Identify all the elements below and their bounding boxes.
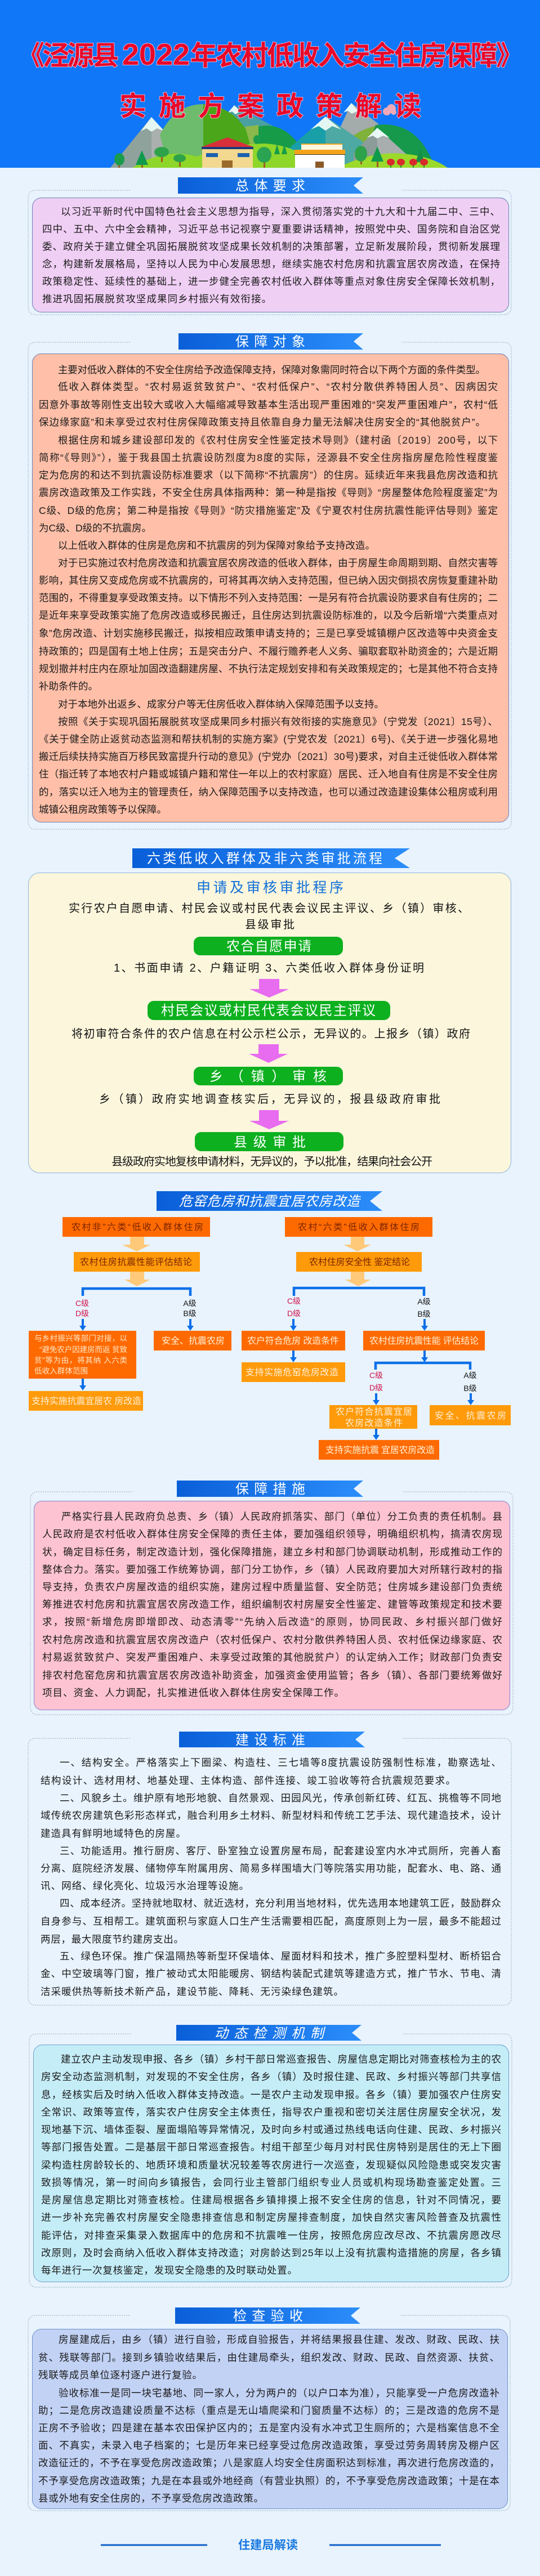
text block: 念，构建新发展格局，坚持以人民为中心发展思想，继续实施农村危房和抗震宜居农房改造，在保持 bbox=[42, 258, 500, 270]
text block: 县或外地有安全住房的，不予享受危房改造政策。 bbox=[38, 2493, 264, 2504]
intro text: 县级审批 bbox=[245, 918, 294, 931]
right branch: D级 bbox=[369, 1383, 383, 1392]
left branch: 贫”等为由，将其纳 入六类 bbox=[34, 1356, 127, 1365]
step: application bbox=[194, 937, 343, 955]
text block: 结构设计、选材用材、地基处理、主体构造、部件连接、竣工验收等符合抗震规范要求。 bbox=[41, 1775, 456, 1786]
text block: 为C级、D级的不抗震房。 bbox=[39, 522, 151, 534]
text block: 对于本地外出返乡、成家分户等无住房低收入群体纳入保障范围予以支持。 bbox=[58, 699, 384, 710]
illustration: mountains, houses and trees bbox=[110, 103, 448, 168]
right branch: A级 bbox=[463, 1371, 477, 1380]
heading banner bbox=[157, 1191, 382, 1211]
right branch: 农户符合危房 改造条件 bbox=[247, 1336, 339, 1346]
arrow bbox=[249, 1110, 289, 1129]
text block: 项目、资金、人力调配，扎实推进低收入群体住房安全保障工作。 bbox=[42, 1687, 344, 1698]
panel: construction standards bbox=[28, 1732, 511, 2005]
text block: C级、D级的危房；第二种是指按《导则》“防灾措施鉴定”及《宁夏农村住房抗震性能评估导则》鉴定 bbox=[39, 505, 498, 516]
text block: 整体合力。落实。要加强工作统筹协调，部门分工协作，乡（镇）人民政府要加大对所辖行政村的指 bbox=[42, 1564, 502, 1575]
panel: coverage bbox=[28, 333, 511, 829]
panel body bbox=[33, 354, 509, 822]
heading banner: 建设标准 bbox=[235, 1733, 305, 1748]
text block: 洁采暖供热等新技术新产品，建设节能、降耗、无污染绿色建筑。 bbox=[41, 1986, 343, 1997]
text block: 村易返贫致贫户、突发严重困难户、未享受过政策的其他脱贫户）的认定纳入工作；财政部门负责安 bbox=[42, 1652, 502, 1663]
heading banner bbox=[178, 177, 363, 194]
text block: 简称“《导则》”），鉴于我县国土抗震设防烈度为8度的实际，泾源县不安全住房指房屋危险性程度鉴 bbox=[39, 452, 498, 463]
intro text bbox=[69, 902, 469, 931]
panel: inspection and acceptance bbox=[28, 2307, 510, 2511]
left branch: 与乡村振兴等部门对接，以 bbox=[34, 1334, 127, 1343]
text block: 四中、五中、六中全会精神，习近平总书记视察宁夏重要讲话精神，按照党中央、国务院和自治区党 bbox=[42, 223, 500, 235]
text block: 房安全动态监测机制，对发现的不安全住房，各乡（镇）及时报住建、民政、乡村振兴等部门共享信 bbox=[41, 2071, 501, 2082]
step: village meeting: 村民会议或村民代表会议民主评议 bbox=[161, 1003, 376, 1018]
left branch: D级 bbox=[75, 1309, 89, 1318]
right branch: 农房改造条件 bbox=[345, 1418, 403, 1428]
text block: 息，经核实后及时纳入低收入群体支持改造。一是农户主动发现申报。各乡（镇）要加强农户住房安 bbox=[41, 2089, 501, 2100]
text block: 建立农户主动发现申报、各乡（镇）乡村干部日常巡查报告、房屋信息定期比对筛查核检为主的农 bbox=[61, 2054, 501, 2065]
right branch: A级 bbox=[417, 1297, 431, 1306]
heading banner: 保障对象 bbox=[235, 334, 305, 350]
arrow bbox=[249, 979, 289, 998]
text block: 主要对低收入群体的不安全住房给予改造保障支持，保障对象需同时符合以下两个方面的条件类型。 bbox=[58, 364, 485, 375]
text block: 梁构造柱房龄较长的、地质环境和质量状况较差等农房进行一次巡查，发现疑似风险隐患或突发灾害 bbox=[41, 2159, 501, 2171]
text block: 每年进行一次复核鉴定，发现安全隐患的及时联动处置。 bbox=[41, 2265, 297, 2276]
text block bbox=[41, 2054, 501, 2276]
left branch: “避免农户因建房而返 贫致 bbox=[39, 1345, 127, 1354]
text block: 域传统农房建筑色彩形态样式，融合利用乡土材料、新型材料和传统工艺手法、现代建造技术，设计 bbox=[41, 1810, 501, 1821]
text block: 状，确定目标任务，制定改造计划，强化保障措施，建立乡村和部门协调联动机制，形成推动工作的 bbox=[42, 1546, 502, 1558]
text block: 低收入群体类型。“农村易返贫致贫户”、“农村低保户”、“农村分散供养特困人员”、因病因灾 bbox=[58, 381, 498, 392]
text block: 保边缘家庭”和未享受过农村住房保障政策支持且依靠自身力量无法解决住房安全的“其他脱贫户”。 bbox=[39, 417, 485, 428]
text block: 住（指迁转了本地农村户籍或城镇户籍和常住一年以上的农村家庭）居民、迁入地自有住房是不安全住房 bbox=[39, 768, 498, 780]
text block: 能评估，对排查采集录入数据库中的危房和不抗震唯一住房，按照危房应改尽改、不抗震房愿改尽 bbox=[41, 2230, 501, 2241]
panel: approval process bbox=[28, 848, 511, 1173]
heading banner: 动态检测机制 bbox=[215, 2026, 326, 2041]
materials text: 1、书面申请 2、户籍证明 3、六类低收入群体身份证明 bbox=[114, 961, 424, 974]
text block bbox=[42, 1511, 502, 1698]
text block: 排农村危窑危房和抗震宜居农房改造补助资金，加强资金使用监管；各乡（镇）、各部门要统筹做好 bbox=[42, 1670, 502, 1681]
intro text: 实行农户自愿申请、村民会议或村民代表会议民主评议、乡（镇）审核、 bbox=[69, 902, 469, 915]
left branch: 支持实施抗震宜居农 房改造 bbox=[32, 1396, 141, 1406]
step: township review bbox=[194, 1067, 343, 1085]
text block: 震房改造政策及工作实践，不安全住房具体指两种：第一种是指按《导则》“房屋整体危险程度鉴定”为 bbox=[39, 487, 498, 498]
text block: 五、绿色环保。推广保温隔热等新型环保墙体、屋面材料和技术，推广多腔塑料型材、断桥铝合 bbox=[60, 1951, 501, 1962]
left branch: 低收入群体范围 bbox=[34, 1367, 88, 1375]
title: 年农村低收入安全住房保障》 bbox=[190, 41, 523, 71]
text block: 筹推进农村危房和抗震宜居农房改造工作，组织编制农村房屋安全性鉴定、建管等政策规定和技术要 bbox=[42, 1599, 502, 1610]
text block: 全常识、政策等宣传，落实农户住房安全主体责任，指导农户重视和密切关注居住房屋安全状况，发 bbox=[41, 2107, 501, 2118]
text block: 贫、残联等部门。接到乡镇验收结果后，由住建局牵头，组织发改、财政、民政、自然资源、扶贫、 bbox=[38, 2352, 499, 2363]
text block: 的，落实以迁入地为主的管理责任，纳入保障范围予以支持改造，也可以通过改造建设集体公租房或利用 bbox=[39, 786, 498, 798]
right branch: 农村“六类”低收入群体住房 bbox=[298, 1222, 419, 1232]
heading banner bbox=[178, 333, 363, 350]
title: 2022 bbox=[122, 38, 190, 71]
panel: dynamic monitoring bbox=[29, 2025, 512, 2287]
heading banner: 检查验收 bbox=[233, 2309, 303, 2324]
text block bbox=[38, 2334, 500, 2504]
text block: 搬迁后续扶持实施百万移民致富提升行动的意见》(宁党办〔2021〕30号)要求，对自主迁徙低收入群体常 bbox=[39, 751, 498, 762]
village text: 将初审符合条件的农户信息在村公示栏公示，无异议的。上报乡（镇）政府 bbox=[72, 1027, 470, 1040]
icon: pink cloud bbox=[383, 104, 396, 115]
panel: renovation flowchart bbox=[29, 1191, 511, 1460]
text block: 不予享受危房改造政策；九是在本县或外地经商（有营业执照）的，不予享受危房改造政策；十是在本 bbox=[38, 2475, 499, 2486]
icon: house with red roof bbox=[202, 137, 253, 168]
hero background bbox=[0, 0, 540, 168]
right branch: 农村住房安全性 鉴定结论 bbox=[309, 1257, 410, 1267]
right branch: B级 bbox=[417, 1309, 431, 1318]
right branch: 农村住房抗震性能 评估结论 bbox=[369, 1336, 479, 1346]
heading banner bbox=[176, 2025, 362, 2041]
text block: 影响，其住房又变成危房或不抗震房的，可将其再次纳入支持范围，但已纳入因灾倒损农房恢复重建补助 bbox=[39, 575, 498, 586]
text block: 是近年来享受政策实施了危房改造或移民搬迁，且住房达到抗震设防标准的，以及今后新增“六类重点对 bbox=[39, 610, 498, 621]
text block: 三、功能适用。推行厨房、客厅、卧室独立设置房屋布局，配套建设室内水冲式厕所，完善人畜 bbox=[60, 1845, 501, 1857]
icon: tulips bbox=[387, 159, 428, 168]
text block: 致损等情况，第一时间向乡镇报告，会同行业主管部门组织专业人员或机构现场勘查鉴定处置。三 bbox=[41, 2177, 501, 2188]
arrow bbox=[249, 1044, 288, 1063]
text block: 以上低收入群体的住房是危房和不抗震房的列为保障对象给予支持改造。 bbox=[58, 540, 375, 551]
text block: 持政策的；四是国有土地上住房；五是突击分户、不履行赡养老人义务、骗取套取补助资金的；六是近期 bbox=[39, 646, 498, 657]
text block: 现地基下沉、墙体歪裂、屋面塌陷等异常情况，及时向乡村或通过热线电话向住建、民政、乡村振兴 bbox=[41, 2124, 501, 2135]
text block: 四、成本经济。坚持就地取材、就近选材，充分利用当地材料，优先选用本地建筑工匠，鼓励群众 bbox=[60, 1898, 501, 1909]
right branch: 支持实施抗震 宜居农房改造 bbox=[325, 1445, 435, 1455]
text block: 自身参与、互相帮工。建筑面积与家庭人口生产生活需要相匹配，高度原则上为一层，最多不能超过 bbox=[41, 1916, 501, 1927]
left branch: 农村非”六类“低收入群体住房 bbox=[72, 1222, 203, 1232]
left branch: 安全、抗震农房 bbox=[162, 1336, 225, 1346]
heading banner bbox=[179, 1732, 365, 1748]
heading banner bbox=[175, 2307, 360, 2324]
text block: 分离、庭院经济发展、储物停车附属用房、简易多样围墙大门等院落实用功能，配套水、电、路、通 bbox=[41, 1863, 501, 1874]
right branch: 安全、抗震农房 bbox=[435, 1411, 506, 1421]
text block: 规划撤并村庄内在原址加固改造翻建房屋、不执行法定规划安排和有关政策规定的；七是其他不符合支持 bbox=[39, 663, 498, 674]
text block: 建造具有鲜明地域特色的房屋。 bbox=[41, 1828, 186, 1839]
text block: 残联等成员单位逐村逐户进行复验。 bbox=[38, 2369, 202, 2381]
text block: 对于已实施过农村危房改造和抗震宜居农房改造的低收入群体，由于房屋生命周期到期、自然灾害等 bbox=[58, 557, 498, 569]
text block: 助；二是危房改造建设质量不达标（重点是无山墙爬梁和门窗质量不达标）的；三是改造的危房不是 bbox=[38, 2405, 499, 2416]
left branch: C级 bbox=[75, 1299, 89, 1308]
heading banner bbox=[132, 848, 410, 868]
text block: 定为危房的和达不到抗震设防标准要求（以下简称“不抗震房”）的住房。延续近年来我县危房改造和抗 bbox=[39, 469, 498, 481]
panel body bbox=[34, 1501, 510, 1710]
text block: 二、风貌乡土。维护原有地形地貌、自然景观、田园风光，传承创新红砖、红瓦、挑檐等不同地 bbox=[60, 1792, 501, 1804]
right branch: B级 bbox=[463, 1384, 477, 1393]
step: county approval: 县级审批 bbox=[234, 1135, 306, 1150]
panel: overall requirements bbox=[28, 177, 511, 315]
right branch bbox=[242, 1217, 511, 1460]
right branch: C级 bbox=[369, 1371, 383, 1380]
text block: 《关于健全防止返贫动态监测和帮扶机制的实施方案》(宁党农发〔2021〕6号)、《关于进一步强化易地 bbox=[39, 734, 498, 745]
text block: 城镇公租房政策等予以保障。 bbox=[39, 804, 167, 815]
heading banner bbox=[177, 1481, 363, 1497]
text block: 导支持，负责农户房屋改造的组织实施，建房过程中质量监督、安全防范；住房城乡建设部门负责统 bbox=[42, 1581, 502, 1593]
left branch: B级 bbox=[183, 1309, 197, 1318]
right branch: 支持实施危窑危房改造 bbox=[246, 1367, 338, 1378]
county text: 县级政府实地复核申请材料，无异议的，予以批准，结果向社会公开 bbox=[111, 1155, 432, 1168]
text block: 房屋建成后，由乡（镇）进行自验，形成自验报告，并将结果报县住建、发改、财政、民政、扶 bbox=[59, 2334, 499, 2345]
text block: 严格实行县人民政府负总责、乡（镇）人民政府抓落实、部门（单位）分工负责的责任机制。县 bbox=[61, 1511, 502, 1522]
text block bbox=[39, 364, 498, 815]
text block: 政策稳定性、延续性的基础上，进一步健全完善农村低收入群体等重点对象住房安全保障长效机制， bbox=[42, 276, 500, 287]
footer: issuing department bbox=[101, 2539, 441, 2552]
step: application: 农合自愿申请 bbox=[226, 939, 311, 954]
step: township review: 乡（镇）审核 bbox=[209, 1069, 327, 1084]
panel body bbox=[28, 873, 511, 1173]
text block: 正房不予验收；四是建在基本农田保护区内的；五是室内没有水冲式卫生厕所的；六是档案信息不全 bbox=[38, 2422, 500, 2434]
text block: 是房屋信息定期比对筛查核检。住建局根据各乡镇排摸上报不安全住房的信息，针对不同情况，要 bbox=[41, 2194, 501, 2206]
panel body bbox=[34, 2045, 509, 2282]
text block: 等部门报告处置。二是基层干部日常巡查报告。村组干部至少每月对村民住房特别是居住的无上下圈 bbox=[41, 2141, 501, 2153]
text block: 求，按照“新增危房即增即改、动态清零”“先纳入后改造”的原则，协同民政、乡村振兴部门做好 bbox=[42, 1616, 502, 1627]
title: 《泾源县 bbox=[17, 41, 119, 71]
text block: 两层，最大限度节约建房支出。 bbox=[41, 1934, 184, 1945]
left branch: A级 bbox=[183, 1299, 197, 1308]
text block: 补助条件的。 bbox=[39, 681, 98, 692]
subtitle: 实施方案政策解读 bbox=[119, 92, 421, 122]
sub-heading: 申请及审核审批程序 bbox=[197, 880, 343, 896]
text block: 面、不真实，未录入电子档案的；七是历年来已经享受过危房改造政策，享受过劳务周转房及棚户区 bbox=[38, 2440, 499, 2451]
text block bbox=[41, 1757, 501, 1997]
right branch: 农户符合抗震宜居 bbox=[336, 1407, 412, 1417]
left branch bbox=[29, 1217, 231, 1411]
panel: safeguards bbox=[30, 1481, 513, 1715]
text block: 人民政府是农村低收入群体住房安全保障的责任主体，要加强组织领导，明确组织机构，搞清农房现 bbox=[42, 1528, 502, 1540]
heading banner: 保障措施 bbox=[235, 1482, 305, 1497]
left branch: 农村住房抗震性能评估结论 bbox=[80, 1257, 192, 1267]
heading banner: 危窑危房和抗震宜居农房改造 bbox=[179, 1194, 362, 1209]
title bbox=[17, 38, 523, 71]
text block: 改造征迁的，不予在享受危房改造政策；八是家庭人均安全住房面积达到标准，再次进行危房改造的， bbox=[38, 2457, 499, 2468]
text block: 讯、网络、绿化亮化、垃圾污水治理等设施。 bbox=[41, 1880, 249, 1891]
text block: 金、中空玻璃等门窗，推广被动式太阳能暖房、钢结构装配式建筑等建造方式，推广节水、节电、清 bbox=[41, 1968, 501, 1979]
text block: 验收标准一是同一块宅基地、同一家人，分为两户的（以户口本为准），只能享受一户危房改造补 bbox=[59, 2387, 499, 2399]
text block: 按照《关于实现巩固拓展脱贫攻坚成果同乡村振兴有效衔接的实施意见》（宁党发〔2021〕15号）、 bbox=[58, 716, 498, 727]
text block: 因意外事故等刚性支出较大或收入大幅缩减导致基本生活出现严重困难的“突发严重困难户”，农村“低 bbox=[39, 399, 498, 410]
icon: white house with orange band bbox=[294, 144, 345, 168]
text block: 改原则，及时会商纳入低收入群体支持改造；对房龄达到25年以上没有抗震构造措施的房屋，各乡镇 bbox=[41, 2247, 501, 2259]
heading banner: 六类低收入群体及非六类审批流程 bbox=[147, 851, 382, 866]
right branch: C级 bbox=[287, 1296, 301, 1305]
text block: 委、政府关于建立健全巩固拓展脱贫攻坚成果长效机制的决策部署，立足新发展阶段，贯彻新发展理 bbox=[42, 241, 500, 252]
heading banner: 总体要求 bbox=[235, 178, 305, 194]
footer: issuing department: 住建局解读 bbox=[238, 2539, 298, 2552]
text block: 一、结构安全。严格落实上下圈梁、构造柱、三七墙等8度抗震设防强制性标准，勘察选址、 bbox=[60, 1757, 501, 1768]
text block bbox=[42, 206, 500, 305]
text block: 以习近平新时代中国特色社会主义思想为指导，深入贯彻落实党的十九大和十九届二中、三中、 bbox=[61, 206, 500, 217]
text block: 推进巩固拓展脱贫攻坚成果同乡村振兴有效衔接。 bbox=[42, 293, 271, 305]
text block: 范围的，不得重复享受政策支持。以下情形不列入支持范围：一是另有符合抗震设防要求自有住房的；二 bbox=[39, 592, 498, 603]
township text: 乡（镇）政府实地调查核实后，无异议的，报县级政府审批 bbox=[99, 1093, 440, 1106]
text block: 根据住房和城乡建设部印发的《农村住房安全性鉴定技术导则》（建村函〔2019〕200号，以下 bbox=[58, 435, 498, 446]
step: county approval bbox=[195, 1132, 343, 1151]
panel body bbox=[33, 2329, 508, 2508]
text block: 进一步补充完善农村房屋安全隐患排查信息和制定房屋排查制度，加快自然灾害风险普查及抗震性 bbox=[41, 2212, 501, 2223]
text block: 象”危房改造、计划实施移民搬迁，拟按相应政策申请支持的；三是已享受城镇棚户区改造等中央资金支 bbox=[39, 628, 498, 639]
text block: 农村危房改造和抗震宜居农房改造户（农村低保户、农村分散供养特困人员、农村低保边缘家庭、农 bbox=[42, 1634, 502, 1645]
panel body bbox=[33, 198, 509, 312]
right branch: D级 bbox=[287, 1309, 301, 1318]
